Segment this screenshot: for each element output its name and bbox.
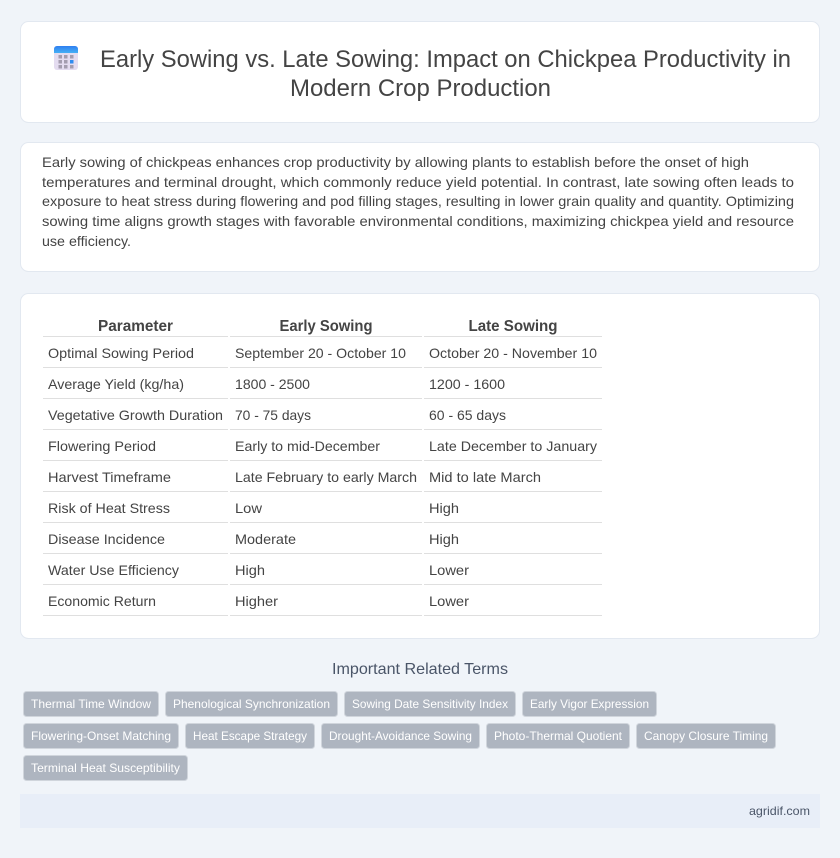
text block: introduction: temperatures and terminal drought, which commonly reduce yield potential. In contrast, late sowing often leads to (42, 174, 794, 190)
table header: Parameter (98, 318, 173, 335)
table rows: Economic Return (48, 593, 156, 609)
table rows: Higher (235, 593, 278, 609)
tag: photo-thermal quotient (486, 724, 630, 748)
table rows: Late December to January (429, 438, 597, 454)
table rows: Late February to early March (235, 469, 417, 485)
tag: flowering-onset matching: Flowering-Onset Matching (31, 729, 171, 743)
table rows: Harvest Timeframe (48, 469, 171, 485)
tag: heat escape strategy: Heat Escape Strategy (193, 729, 307, 743)
table rows: Vegetative Growth Duration (48, 407, 223, 423)
table rows: High (429, 500, 459, 516)
table header: Early Sowing (280, 318, 372, 335)
table rows: Optimal Sowing Period (48, 345, 194, 361)
title (100, 46, 791, 102)
related term tags (24, 692, 776, 780)
tag: terminal heat susceptibility: Terminal Heat Susceptibility (31, 761, 180, 775)
table rows: High (429, 531, 459, 547)
table rows: September 20 - October 10 (235, 345, 406, 361)
table rows: High (235, 562, 265, 578)
tag: thermal time window: Thermal Time Window (31, 697, 151, 711)
table rows: Early to mid-December (235, 438, 380, 454)
table rows: October 20 - November 10 (429, 345, 597, 361)
table rows: Risk of Heat Stress (48, 500, 170, 516)
text block: introduction (42, 154, 794, 249)
footer: site name: agridif.com (749, 804, 810, 818)
tag: drought-avoidance sowing (322, 724, 480, 748)
table rows: 1200 - 1600 (429, 376, 505, 392)
title: Modern Crop Production (290, 75, 551, 102)
text block: introduction: use efficiency. (42, 233, 131, 249)
tag: sowing date sensitivity index: Sowing Date Sensitivity Index (352, 697, 508, 711)
tag: phenological synchronization (166, 692, 338, 716)
tag: terminal heat susceptibility (24, 756, 188, 780)
table rows: 60 - 65 days (429, 407, 506, 423)
table rows: Moderate (235, 531, 296, 547)
text block: introduction: sowing time aligns growth stages with favorable environmental conditions, maximizing chickpea yield and resource (42, 213, 794, 229)
table rows: 1800 - 2500 (235, 376, 310, 392)
panel: introduction text (20, 142, 820, 272)
table rows: Water Use Efficiency (48, 562, 179, 578)
table rows: Mid to late March (429, 469, 541, 485)
tag: canopy closure timing: Canopy Closure Timing (644, 729, 768, 743)
tag: drought-avoidance sowing: Drought-Avoidance Sowing (329, 729, 472, 743)
table rows: 70 - 75 days (235, 407, 311, 423)
tag: canopy closure timing (636, 724, 776, 748)
tag: sowing date sensitivity index (344, 692, 516, 716)
icon: calendar (54, 46, 78, 70)
table rows: Lower (429, 562, 469, 578)
table rows: Disease Incidence (48, 531, 165, 547)
table rows: Lower (429, 593, 469, 609)
table rows: Flowering Period (48, 438, 156, 454)
tag: flowering-onset matching (24, 724, 178, 748)
table header: Late Sowing (468, 318, 558, 335)
tag: early vigor expression: Early Vigor Expression (530, 697, 649, 711)
text block: introduction: exposure to heat stress during flowering and pod filling stages, resulting in lower grain quality and quantity. Optimizing (42, 193, 794, 209)
panel: comparison table (20, 294, 820, 638)
tag: phenological synchronization: Phenological Synchronization (173, 697, 330, 711)
tag: thermal time window (24, 692, 158, 716)
panel: title header (20, 22, 820, 122)
table rows: Low (235, 500, 263, 516)
tag: photo-thermal quotient: Photo-Thermal Quotient (494, 729, 623, 743)
heading: important related terms: Important Related Terms (332, 661, 508, 678)
table rows: Average Yield (kg/ha) (48, 376, 184, 392)
tag: heat escape strategy (186, 724, 314, 748)
table rows (48, 345, 597, 609)
title: Early Sowing vs. Late Sowing: Impact on Chickpea Productivity in (100, 46, 791, 73)
text block: introduction: Early sowing of chickpeas enhances crop productivity by allowing plants to establish before the onset of high (42, 154, 749, 170)
tag: early vigor expression (522, 692, 656, 716)
table header (98, 318, 558, 335)
footer (20, 794, 820, 828)
